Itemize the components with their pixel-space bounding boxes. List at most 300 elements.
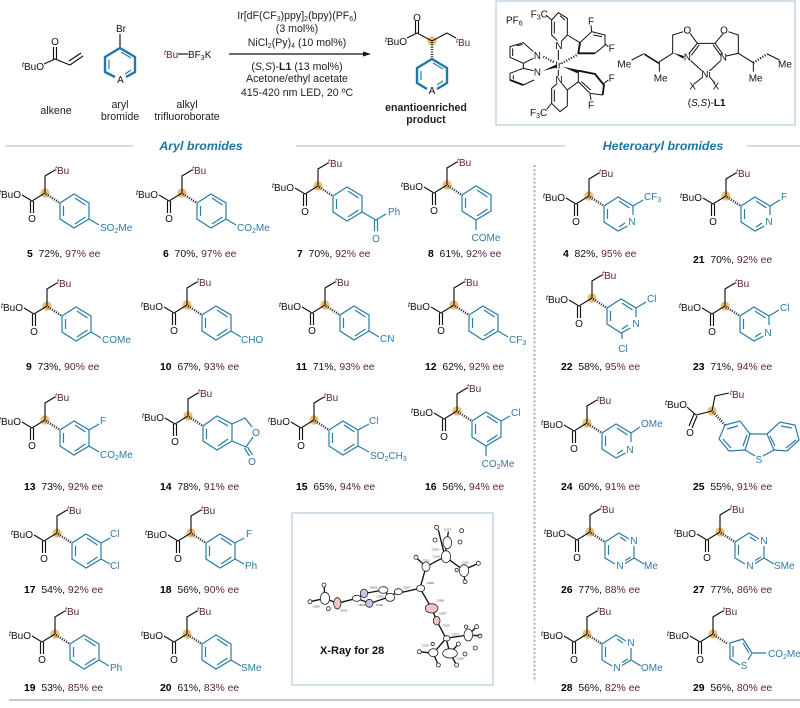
iridium photocatalyst: Ir	[555, 61, 562, 72]
compound 17: t	[11, 530, 14, 537]
compound 28: N	[627, 638, 635, 649]
compound 6: 6 70%, 97% ee	[163, 249, 237, 260]
compound 18: 18 56%, 90% ee	[160, 585, 239, 596]
compound 19: t	[65, 607, 68, 614]
enantioenriched product: Bu	[458, 38, 470, 49]
compound 28: Bu	[599, 607, 611, 618]
compound 16	[411, 384, 520, 493]
compound 11: BuO	[281, 302, 301, 313]
compound 19: 19 53%, 85% ee	[24, 683, 103, 694]
compound 18: BuO	[147, 530, 167, 541]
compound 28	[541, 607, 663, 694]
compound 20: t	[197, 607, 200, 614]
compound 26: N	[616, 561, 624, 572]
compound 10: BuO	[143, 302, 163, 313]
ORTEP crystal structure: C014	[432, 548, 439, 552]
compound 13: 13 73%, 92% ee	[24, 482, 103, 493]
compound 7: O	[301, 207, 309, 218]
reaction arrow with conditions: NiCl	[248, 37, 268, 49]
compound 17: Cl	[110, 529, 119, 540]
reaction arrow with conditions: 415-420 nm LED, 20 ºC	[241, 87, 353, 99]
compound 18	[145, 506, 257, 596]
ligand L1 with nickel: N	[720, 53, 727, 64]
compound 11: Bu	[337, 278, 349, 289]
compound 22	[546, 271, 656, 373]
aryl bromide reactant: aryl	[111, 99, 129, 111]
compound 28: t	[597, 607, 600, 614]
compound 27: BuO	[676, 529, 696, 540]
compound 12: t	[408, 302, 411, 309]
compound 18: O	[174, 554, 182, 565]
ORTEP crystal structure: C012	[423, 559, 430, 563]
alkyl trifluoroborate reactant: alkyl	[176, 99, 198, 111]
compound 7: Ph	[388, 207, 400, 218]
compound 23: N	[764, 328, 772, 339]
compound 19	[9, 607, 122, 694]
compound 7: O	[372, 234, 380, 245]
compound 18: Ph	[245, 561, 257, 572]
compound 24: BuO	[543, 420, 563, 431]
compound 10: O	[170, 326, 178, 337]
reaction arrow with conditions: (Py)	[272, 37, 291, 49]
ORTEP crystal structure: C016	[433, 554, 440, 558]
compound 6: BuO	[138, 190, 158, 201]
compound 4: 3	[657, 197, 661, 204]
compound 28: t	[541, 631, 544, 638]
compound 13: BuO	[1, 417, 21, 428]
compound 13: CO	[100, 450, 115, 461]
compound 21: t	[736, 169, 739, 176]
ORTEP crystal structure: C018	[474, 633, 481, 637]
compound 29: t	[723, 607, 726, 614]
compound 9: COMe	[102, 335, 131, 346]
compound 24: Bu	[599, 396, 611, 407]
compound 25: 25 55%, 91% ee	[693, 482, 772, 493]
iridium photocatalyst: F	[609, 74, 615, 85]
compound 16: O	[440, 432, 448, 443]
reaction arrow with conditions: 4	[291, 43, 295, 50]
compound 24: t	[597, 396, 600, 403]
reaction arrow with conditions: 2	[304, 16, 308, 23]
compound 17: t	[67, 506, 70, 513]
ligand L1 with nickel	[617, 25, 792, 109]
compound 20: SMe	[241, 663, 262, 674]
compound 16: 16 56%, 94% ee	[425, 482, 504, 493]
ligand L1 with nickel: Me	[654, 74, 668, 85]
enantioenriched product: BuO	[387, 37, 407, 48]
reaction arrow with conditions: 2	[268, 43, 272, 50]
compound 19: Ph	[110, 663, 122, 674]
compound 27	[674, 505, 795, 596]
compound 22: 22 58%, 95% ee	[561, 362, 640, 373]
compound 13: O	[28, 441, 36, 452]
compound 8: Bu	[459, 158, 471, 169]
compound 14: O	[171, 437, 179, 448]
compound 16: Cl	[511, 408, 520, 419]
compound 21: t	[680, 193, 683, 200]
alkyl trifluoroborate reactant: BF	[188, 50, 201, 61]
compound 16: BuO	[413, 408, 433, 419]
ORTEP crystal structure: O008	[437, 598, 444, 602]
iridium photocatalyst: F	[609, 44, 615, 55]
compound 26: BuO	[546, 529, 566, 540]
compound 20: t	[141, 631, 144, 638]
iridium photocatalyst	[506, 10, 615, 120]
compound 4: 4 82%, 95% ee	[563, 249, 637, 260]
compound 11: O	[308, 326, 316, 337]
iridium photocatalyst: 3	[536, 113, 540, 120]
compound 7: t	[272, 183, 275, 190]
compound 25: Bu	[732, 390, 744, 401]
compound 11	[279, 278, 394, 373]
compound 7: t	[328, 159, 331, 166]
alkene reactant	[22, 37, 83, 117]
compound 6: t	[136, 190, 139, 197]
compound 12: O	[437, 326, 445, 337]
ORTEP crystal structure: C008	[427, 581, 434, 585]
compound 21: F	[781, 192, 787, 203]
ORTEP crystal structure: C005	[377, 594, 384, 598]
compound 27: t	[674, 529, 677, 536]
alkyl trifluoroborate reactant: Bu	[166, 50, 178, 61]
compound 10: CHO	[241, 335, 263, 346]
compound 5: BuO	[1, 190, 21, 201]
compound 23	[679, 279, 789, 373]
compound 25: O	[686, 428, 694, 439]
compound 13: F	[100, 416, 106, 427]
heading: heteroaryl bromides: Heteroaryl bromides	[603, 139, 723, 153]
compound 20: O	[170, 655, 178, 666]
compound 29: t	[667, 631, 670, 638]
alkene reactant: t	[22, 62, 25, 69]
compound 28: OMe	[641, 663, 663, 674]
compound 10	[141, 278, 263, 373]
compound 17	[11, 506, 119, 596]
aryl bromide reactant: bromide	[101, 111, 139, 123]
compound 19: Bu	[67, 607, 79, 618]
compound 11: t	[335, 278, 338, 285]
panel: catalyst and ligand structures	[496, 1, 795, 125]
ORTEP crystal structure: C015	[462, 560, 469, 564]
compound 6	[136, 166, 270, 260]
compound 18: t	[201, 506, 204, 513]
compound 24: t	[541, 420, 544, 427]
iridium photocatalyst: N	[555, 41, 563, 52]
compound 6: CO	[237, 223, 252, 234]
ligand L1 with nickel: O	[683, 25, 691, 36]
compound 16: t	[467, 384, 470, 391]
compound 9: O	[30, 327, 38, 338]
iridium photocatalyst: 3	[537, 15, 541, 22]
compound 26: t	[600, 505, 603, 512]
enantioenriched product: A	[429, 86, 436, 97]
ORTEP crystal structure: N003	[358, 603, 366, 607]
compound 6: Bu	[194, 166, 206, 177]
compound 23: Cl	[780, 303, 789, 314]
iridium photocatalyst: F	[588, 100, 594, 111]
aryl bromide reactant: A	[117, 75, 124, 86]
compound 9: Bu	[59, 279, 71, 290]
compound 22: Bu	[604, 271, 616, 282]
compound 21	[680, 169, 787, 266]
compound 21: 21 70%, 92% ee	[693, 255, 772, 266]
compound 7: BuO	[274, 183, 294, 194]
reaction arrow with conditions: (bpy)(PF	[308, 10, 350, 22]
compound 4: CF	[644, 192, 657, 203]
compound 14: t	[142, 413, 145, 420]
reaction arrow with conditions: (S,S)-L1 (13 mol%)	[251, 61, 343, 73]
compound 5: Me	[118, 223, 133, 234]
compound 15: t	[324, 393, 327, 400]
compound 15: 2	[384, 456, 388, 463]
compound 23: Bu	[737, 279, 749, 290]
compound 12: CF	[509, 335, 522, 346]
compound 5: SO	[100, 223, 114, 234]
compound 8: BuO	[403, 182, 423, 193]
aryl bromide reactant: Br	[116, 24, 127, 35]
ligand L1 with nickel: Me	[749, 74, 763, 85]
compound 14: O	[248, 457, 256, 468]
compound 28: 28 56%, 82% ee	[561, 683, 640, 694]
iridium photocatalyst: C	[540, 108, 547, 119]
compound 9	[1, 279, 131, 373]
compound 26: N	[630, 536, 638, 547]
compound 19: BuO	[11, 631, 31, 642]
compound 12	[408, 278, 526, 373]
compound 13: Bu	[57, 393, 69, 404]
alkyl trifluoroborate reactant: t	[164, 50, 167, 57]
compound 29: 29 56%, 80% ee	[693, 683, 772, 694]
compound 25	[665, 390, 799, 493]
iridium photocatalyst: F	[531, 10, 537, 21]
iridium photocatalyst: N	[555, 75, 563, 86]
ORTEP crystal structure: C017	[452, 632, 459, 636]
compound 26: Bu	[602, 505, 614, 516]
compound 29: CO	[768, 649, 783, 660]
compound 5: Bu	[57, 166, 69, 177]
compound 8: O	[430, 206, 438, 217]
compound 7: Bu	[330, 159, 342, 170]
enantioenriched product: t	[456, 38, 459, 45]
compound 27: N	[746, 561, 754, 572]
compound 25: t	[665, 400, 668, 407]
compound 23: t	[679, 303, 682, 310]
compound 7: 7 70%, 92% ee	[297, 249, 371, 260]
compound 14: 14 78%, 91% ee	[160, 482, 239, 493]
compound 5	[0, 166, 133, 260]
compound 29: BuO	[669, 631, 689, 642]
alkene reactant: O	[51, 37, 59, 48]
compound 18: t	[145, 530, 148, 537]
reaction arrow with conditions: (10 mol%)	[295, 37, 346, 49]
compound 8: 8 61%, 92% ee	[428, 249, 502, 260]
compound 22: O	[575, 319, 583, 330]
iridium photocatalyst: F	[530, 108, 536, 119]
compound 17: O	[40, 554, 48, 565]
compound 26: O	[573, 553, 581, 564]
ligand L1 with nickel: X	[689, 81, 696, 92]
panel: X-ray structure of compound 28	[292, 513, 493, 685]
alkyl trifluoroborate reactant: 3	[201, 55, 205, 62]
compound 29	[667, 607, 800, 694]
reaction arrow with conditions: Acetone/ethyl acetate	[246, 73, 348, 85]
compound 18: F	[246, 529, 252, 540]
compound 12: Bu	[466, 278, 478, 289]
compound 10: t	[197, 278, 200, 285]
iridium photocatalyst: N	[534, 67, 541, 78]
reaction arrow with conditions: )	[353, 10, 357, 22]
X-ray caption: X-Ray for 28	[320, 645, 384, 657]
ligand L1 with nickel: O	[720, 25, 728, 36]
compound 15: O	[297, 441, 305, 452]
compound 15: SO	[370, 451, 384, 462]
compound 21: BuO	[682, 193, 702, 204]
compound 22: BuO	[548, 295, 568, 306]
enantioenriched product	[385, 13, 470, 126]
compound 27: t	[730, 505, 733, 512]
compound 21: O	[709, 217, 717, 228]
reaction arrow with conditions: 3	[277, 16, 281, 23]
iridium photocatalyst: N	[534, 51, 541, 62]
iridium photocatalyst: C	[541, 10, 548, 21]
compound 13	[0, 393, 133, 493]
compound 14: t	[198, 389, 201, 396]
compound 8: t	[457, 158, 460, 165]
compound 22: N	[632, 319, 640, 330]
compound 14: O	[252, 428, 260, 439]
compound 15: Cl	[369, 416, 378, 427]
ligand L1 with nickel: N	[684, 53, 691, 64]
compound 22: Cl	[647, 294, 656, 305]
ORTEP crystal structure: C020	[457, 656, 464, 660]
compound 26: Me	[644, 561, 658, 572]
compound 16: Me	[500, 459, 515, 470]
compound 24: N	[626, 445, 634, 456]
ORTEP crystal structure: C019	[422, 644, 429, 648]
compound 27: Bu	[732, 505, 744, 516]
compound 4: t	[543, 193, 546, 200]
ORTEP crystal structure: O002	[340, 608, 348, 612]
compound 10: t	[141, 302, 144, 309]
ORTEP crystal structure: C006	[376, 603, 383, 607]
compound 20: BuO	[143, 631, 163, 642]
alkene reactant: alkene	[40, 105, 72, 117]
compound 15: BuO	[270, 417, 290, 428]
compound 10: 10 67%, 93% ee	[160, 362, 239, 373]
compound 11: t	[279, 302, 282, 309]
compound 12: t	[464, 278, 467, 285]
compound 9: t	[57, 279, 60, 286]
compound 4: t	[599, 169, 602, 176]
compound 26: 26 77%, 88% ee	[561, 585, 640, 596]
compound 5: 2	[114, 228, 118, 235]
compound 5: O	[28, 214, 36, 225]
ORTEP crystal structure: O007	[439, 612, 447, 616]
compound 25: t	[730, 390, 733, 397]
reaction arrow with conditions: )ppy]	[281, 10, 304, 22]
compound 16: Bu	[469, 384, 481, 395]
enantioenriched product: enantioenriched	[385, 102, 467, 114]
compound 20: 20 61%, 83% ee	[160, 683, 239, 694]
compound 28: N	[613, 663, 621, 674]
compound 17: Bu	[69, 506, 81, 517]
reaction arrow with conditions	[229, 10, 371, 99]
compound 15: CH	[388, 451, 403, 462]
compound 7	[272, 159, 400, 260]
ORTEP crystal structure: C013	[444, 528, 451, 532]
compound 24: 24 60%, 91% ee	[561, 482, 640, 493]
compound 20: Bu	[199, 607, 211, 618]
alkyl trifluoroborate reactant: K	[205, 50, 212, 61]
compound 24	[541, 396, 663, 493]
compound 4	[543, 169, 661, 260]
compound 15	[268, 393, 407, 493]
compound 17: BuO	[13, 530, 33, 541]
heading: aryl bromides: Aryl bromides	[158, 139, 243, 153]
compound 29: 2	[783, 654, 787, 661]
compound 27: O	[703, 553, 711, 564]
compound 21: N	[765, 217, 773, 228]
compound 25: S	[756, 455, 763, 466]
compound 21: Bu	[738, 169, 750, 180]
ligand L1 with nickel: (S,S)-L1	[688, 98, 726, 109]
compound 25: BuO	[667, 400, 687, 411]
iridium photocatalyst: F	[588, 17, 594, 28]
iridium photocatalyst: PF	[506, 15, 519, 26]
compound 5: 5 72%, 97% ee	[27, 249, 101, 260]
compound 28: O	[570, 655, 578, 666]
compound 14: Bu	[200, 389, 212, 400]
compound 15: t	[268, 417, 271, 424]
compound 4: N	[628, 217, 636, 228]
compound 5: t	[55, 166, 58, 173]
ORTEP crystal structure: C010	[443, 624, 450, 628]
alkyl trifluoroborate reactant: trifluoroborate	[154, 111, 220, 123]
compound 6: 2	[252, 228, 256, 235]
compound 16: 2	[497, 464, 501, 471]
ORTEP crystal structure: C005	[313, 604, 320, 608]
ORTEP crystal structure	[308, 525, 482, 667]
compound 23: O	[708, 327, 716, 338]
compound 26	[544, 505, 658, 596]
compound 17: Cl	[110, 561, 119, 572]
compound 19: O	[38, 655, 46, 666]
compound 14	[142, 389, 260, 493]
ORTEP crystal structure: C007	[403, 586, 411, 590]
ORTEP crystal structure: N004	[370, 586, 377, 590]
compound 12: 12 62%, 92% ee	[425, 362, 504, 373]
enantioenriched product: t	[385, 37, 388, 44]
compound 13: 2	[115, 455, 119, 462]
compound 27: SMe	[774, 561, 795, 572]
compound 14: BuO	[144, 413, 164, 424]
reaction scheme	[22, 10, 470, 126]
compound 24: OMe	[641, 419, 663, 430]
alkyl trifluoroborate reactant	[154, 50, 220, 123]
compound 17: 17 54%, 92% ee	[24, 585, 103, 596]
compound 12: 3	[522, 340, 526, 347]
compound 16: t	[411, 408, 414, 415]
compound 15: 3	[403, 456, 407, 463]
compound 29: O	[696, 655, 704, 666]
reaction arrow with conditions: Ir[dF(CF	[237, 10, 277, 22]
compound 26: t	[544, 529, 547, 536]
compound 10: Bu	[199, 278, 211, 289]
compound 13: Me	[119, 450, 133, 461]
compound 24: O	[570, 444, 578, 455]
compound 8: COMe	[472, 233, 501, 244]
compound 4: Bu	[601, 169, 613, 180]
